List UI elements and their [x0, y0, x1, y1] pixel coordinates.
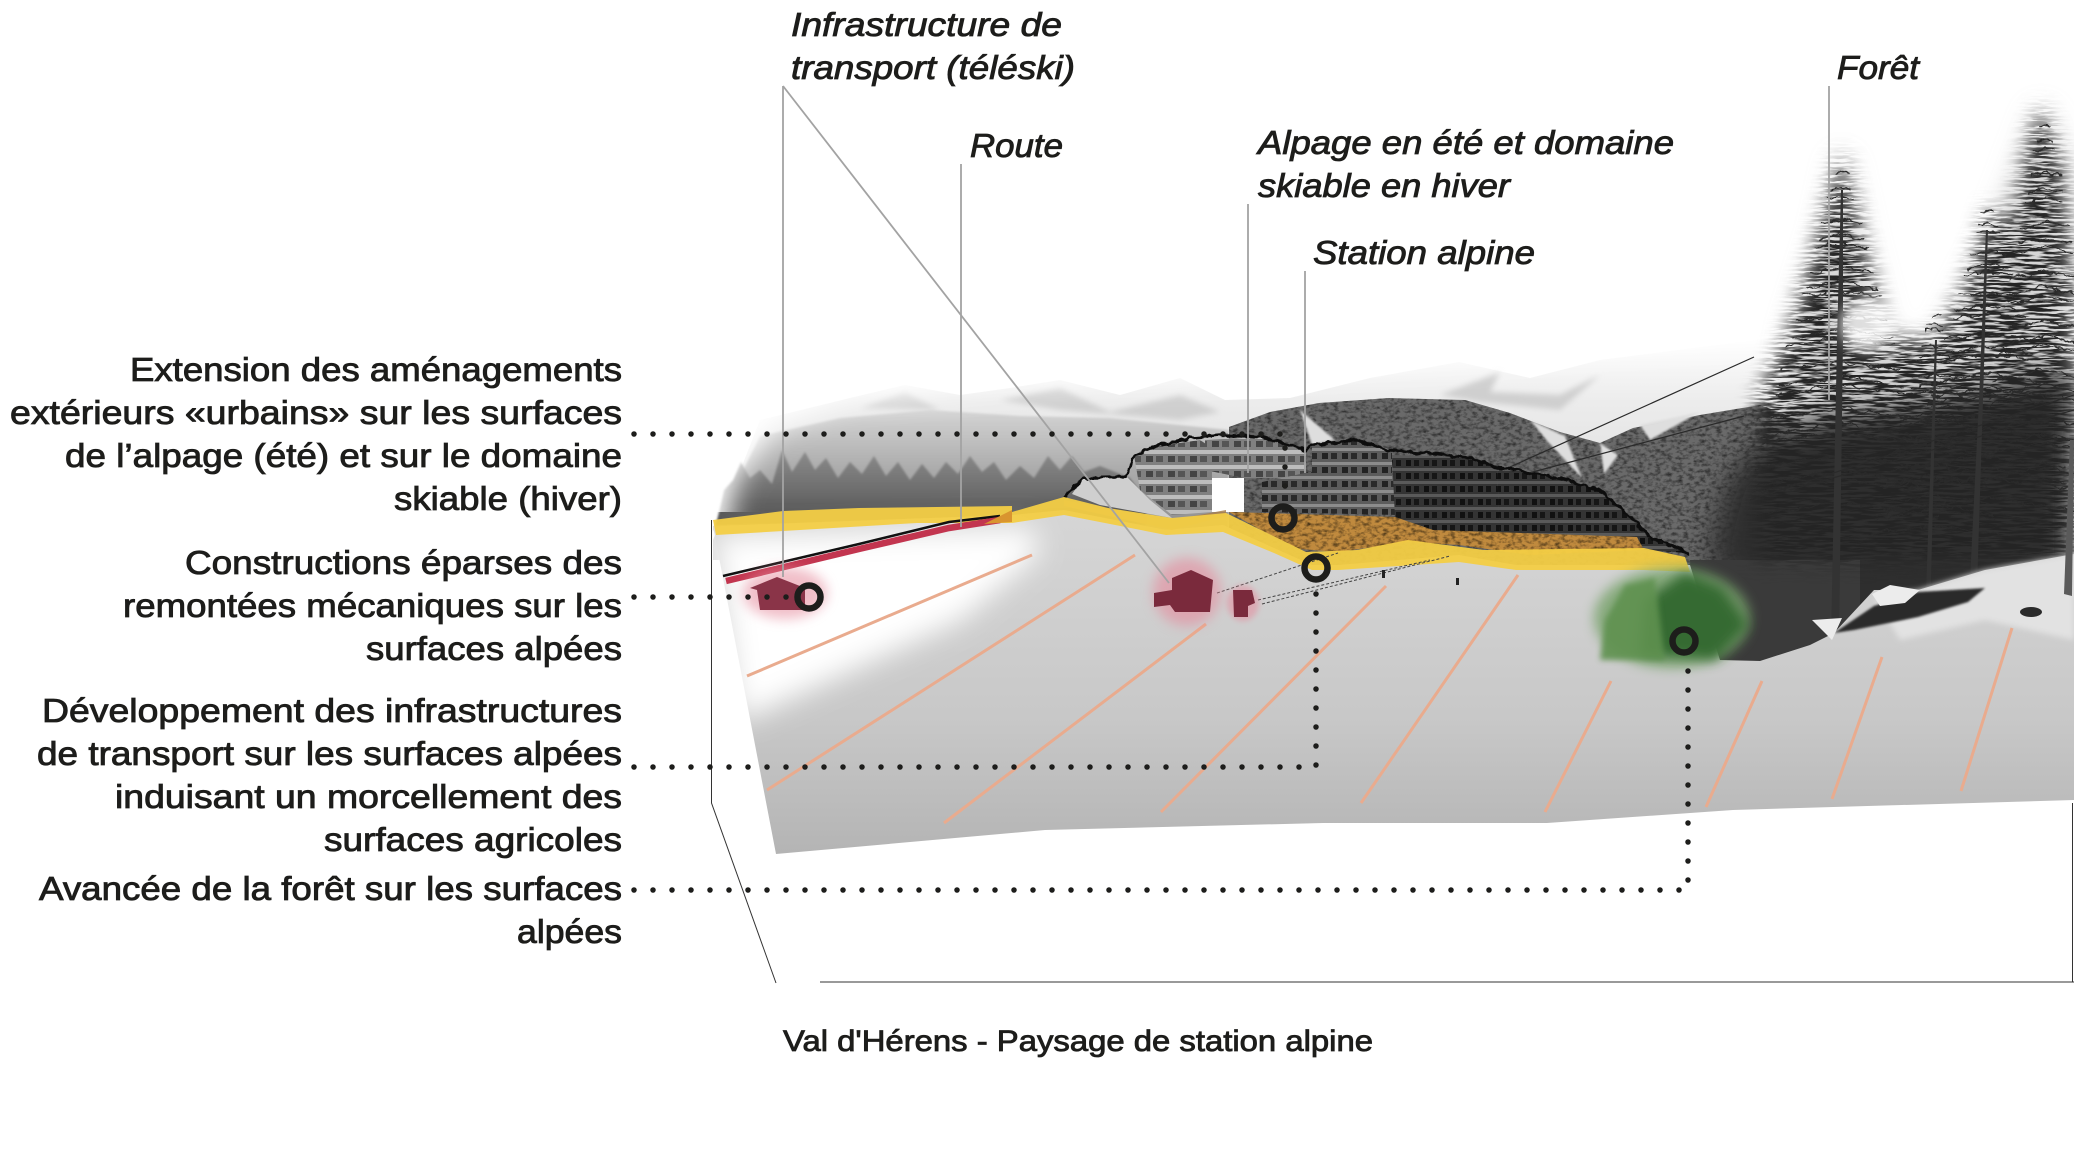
ring markers	[798, 506, 1696, 652]
building 3	[1233, 590, 1255, 617]
fence along terrace	[1064, 500, 1226, 530]
label: Alpage: skiable en hiver	[1258, 167, 1512, 204]
label: Infrastructure de transport: transport (téléski)	[791, 49, 1075, 86]
pink halo 1	[743, 567, 827, 619]
callout: téléski diagonal	[783, 86, 1169, 583]
green glow	[1594, 568, 1750, 668]
small rocks	[2020, 607, 2042, 617]
building 2	[1154, 570, 1213, 612]
callout: station	[1304, 271, 1306, 473]
dotted leader lines	[634, 434, 1688, 890]
photo: mountain backdrop and treeline	[713, 364, 1800, 568]
forest haze	[1790, 105, 2074, 500]
building E	[1392, 455, 1500, 535]
tree trunks	[1831, 190, 1988, 640]
frame lines of the block	[712, 520, 2074, 983]
callout: forêt	[1828, 86, 1830, 400]
building B	[1205, 437, 1306, 478]
forest dark body	[1708, 370, 2074, 670]
light snow band on the right	[1874, 554, 2074, 640]
annex building	[1072, 477, 1172, 518]
road red surface	[726, 520, 1000, 581]
leader: transport	[634, 585, 1316, 767]
upper forest twig texture	[1757, 105, 2074, 560]
text block: scattered buildings: surfaces alpées	[366, 630, 622, 667]
roof outline	[1064, 435, 1689, 553]
far mountain shading	[860, 372, 1600, 420]
green core	[1640, 572, 1748, 660]
building D	[1312, 440, 1392, 495]
road shadow edge	[723, 516, 1000, 576]
text block: urban extension: de l’alpage (été) et sur le domaine	[65, 437, 622, 474]
far snowy mountains	[713, 364, 1796, 560]
orange terrace: urban outdoor extension	[1229, 512, 1644, 555]
callout: téléski vertical	[782, 86, 784, 577]
tree trunk at right edge	[2064, 440, 2074, 596]
larch trees	[1745, 124, 2074, 534]
text block: scattered buildings: remontées mécaniques sur les	[123, 587, 622, 624]
ground surface	[713, 510, 2074, 854]
snow cap on rock	[1812, 585, 1920, 640]
ski lift cables and skiers	[1217, 553, 1459, 604]
caption: Val d'Hérens - Paysage de station alpine	[783, 1025, 1373, 1058]
yellow band: alpine pasture and ski area	[713, 497, 1690, 572]
label: Infrastructure de transport: Infrastructure de	[791, 6, 1062, 43]
text block: forest: Avancée de la forêt sur les surfaces	[39, 870, 622, 907]
white snow patch on the left	[716, 528, 1040, 722]
snow streaks on slope	[1300, 410, 1700, 478]
leader: scattered buildings	[634, 594, 795, 600]
text block: transport: de transport sur les surfaces alpées	[37, 735, 622, 772]
callout: alpage	[1247, 204, 1249, 473]
label: Forêt: Forêt	[1837, 49, 1921, 86]
text block: urban extension: Extension des aménagements	[130, 351, 622, 388]
mid grey forested slope	[713, 410, 1229, 530]
forest advance: green overlay	[1594, 568, 1750, 668]
white block	[1208, 478, 1244, 512]
snowy ground	[713, 440, 2074, 854]
callout lines	[783, 86, 1829, 583]
text block: transport: surfaces agricoles	[324, 821, 622, 858]
text block: scattered buildings: Constructions éparses des	[185, 544, 622, 581]
dark right slope	[1229, 398, 1800, 580]
rock under snow	[1834, 588, 1985, 633]
green tree texture	[1600, 578, 1665, 660]
scattered lift buildings	[743, 558, 1259, 626]
road join	[984, 510, 1012, 524]
text block: transport: Développement des infrastructures	[42, 692, 622, 729]
label: Alpage: Alpage en été et domaine	[1256, 124, 1674, 161]
building C	[1262, 472, 1400, 515]
power lines through forest	[1510, 357, 2074, 500]
building F	[1497, 467, 1689, 553]
treeline	[716, 450, 1146, 525]
hotels of the alpine station	[1064, 435, 1689, 555]
sun glow	[1841, 299, 1893, 351]
text block: urban extension: extérieurs «urbains» sur les surfaces	[10, 394, 622, 431]
orange parcel lines on the ground	[747, 555, 2012, 823]
text block: urban extension: skiable (hiver)	[394, 480, 622, 517]
label: Route: Route	[970, 127, 1063, 164]
forest foot behind green area	[1690, 560, 1860, 675]
label: Station alpine: Station alpine	[1313, 234, 1535, 271]
pink halo 2	[1153, 558, 1221, 626]
text block: forest: alpées	[517, 913, 622, 950]
building 1	[750, 577, 805, 610]
leader: forest	[634, 658, 1688, 890]
pink halo 3	[1227, 585, 1259, 621]
building A	[1134, 440, 1212, 515]
photo: larch forest on the right	[1510, 105, 2074, 675]
callout: route	[960, 164, 962, 527]
road	[723, 510, 1012, 581]
text block: transport: induisant un morcellement des	[115, 778, 622, 815]
leader: urban extension	[634, 434, 1285, 503]
